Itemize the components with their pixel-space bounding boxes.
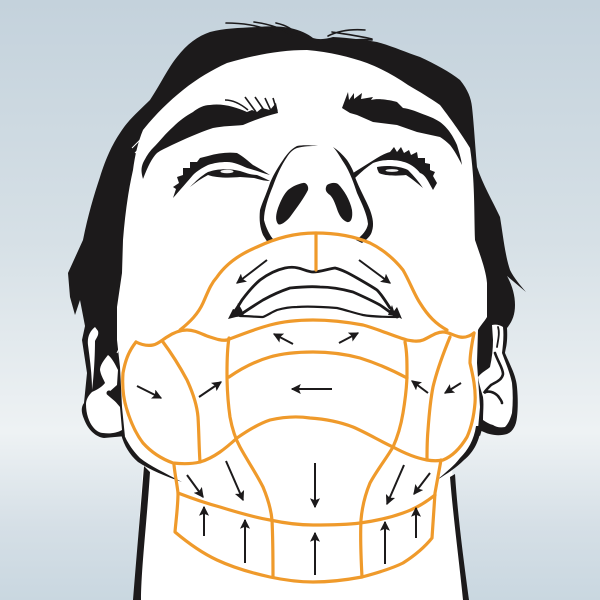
hair wisps [226, 22, 372, 43]
neck band line [178, 493, 435, 525]
left ear [86, 327, 122, 433]
left eyebrow [142, 97, 278, 179]
arrows: neck [203, 507, 205, 536]
white hair strands [117, 134, 147, 354]
cheek divider right [427, 337, 450, 460]
cheek divider left [163, 342, 200, 462]
right ear [478, 322, 518, 435]
arrows: cheeks [137, 386, 161, 398]
mouth corners [228, 303, 244, 319]
mouth [228, 267, 402, 319]
centre divider left [227, 338, 273, 577]
right eye [353, 147, 437, 190]
direction arrows [137, 260, 461, 575]
arrows: upper lip [237, 260, 267, 283]
right eyebrow [342, 92, 462, 165]
shaving zones [123, 233, 475, 582]
upper lip zone [180, 233, 447, 330]
jaw outline [121, 426, 481, 482]
eyebrow hairs [225, 97, 277, 113]
arrows: chin [274, 334, 293, 344]
lower lip arc [229, 352, 407, 378]
hair [68, 22, 526, 438]
face [117, 50, 487, 495]
nose [260, 145, 373, 243]
nostrils [276, 183, 308, 225]
neck [133, 465, 469, 600]
chin top band [136, 320, 474, 345]
centre divider right [361, 342, 407, 577]
left eye [173, 153, 270, 198]
arrows: under jaw [187, 475, 203, 497]
neck band outline [174, 460, 441, 582]
jawline outer [123, 333, 475, 464]
